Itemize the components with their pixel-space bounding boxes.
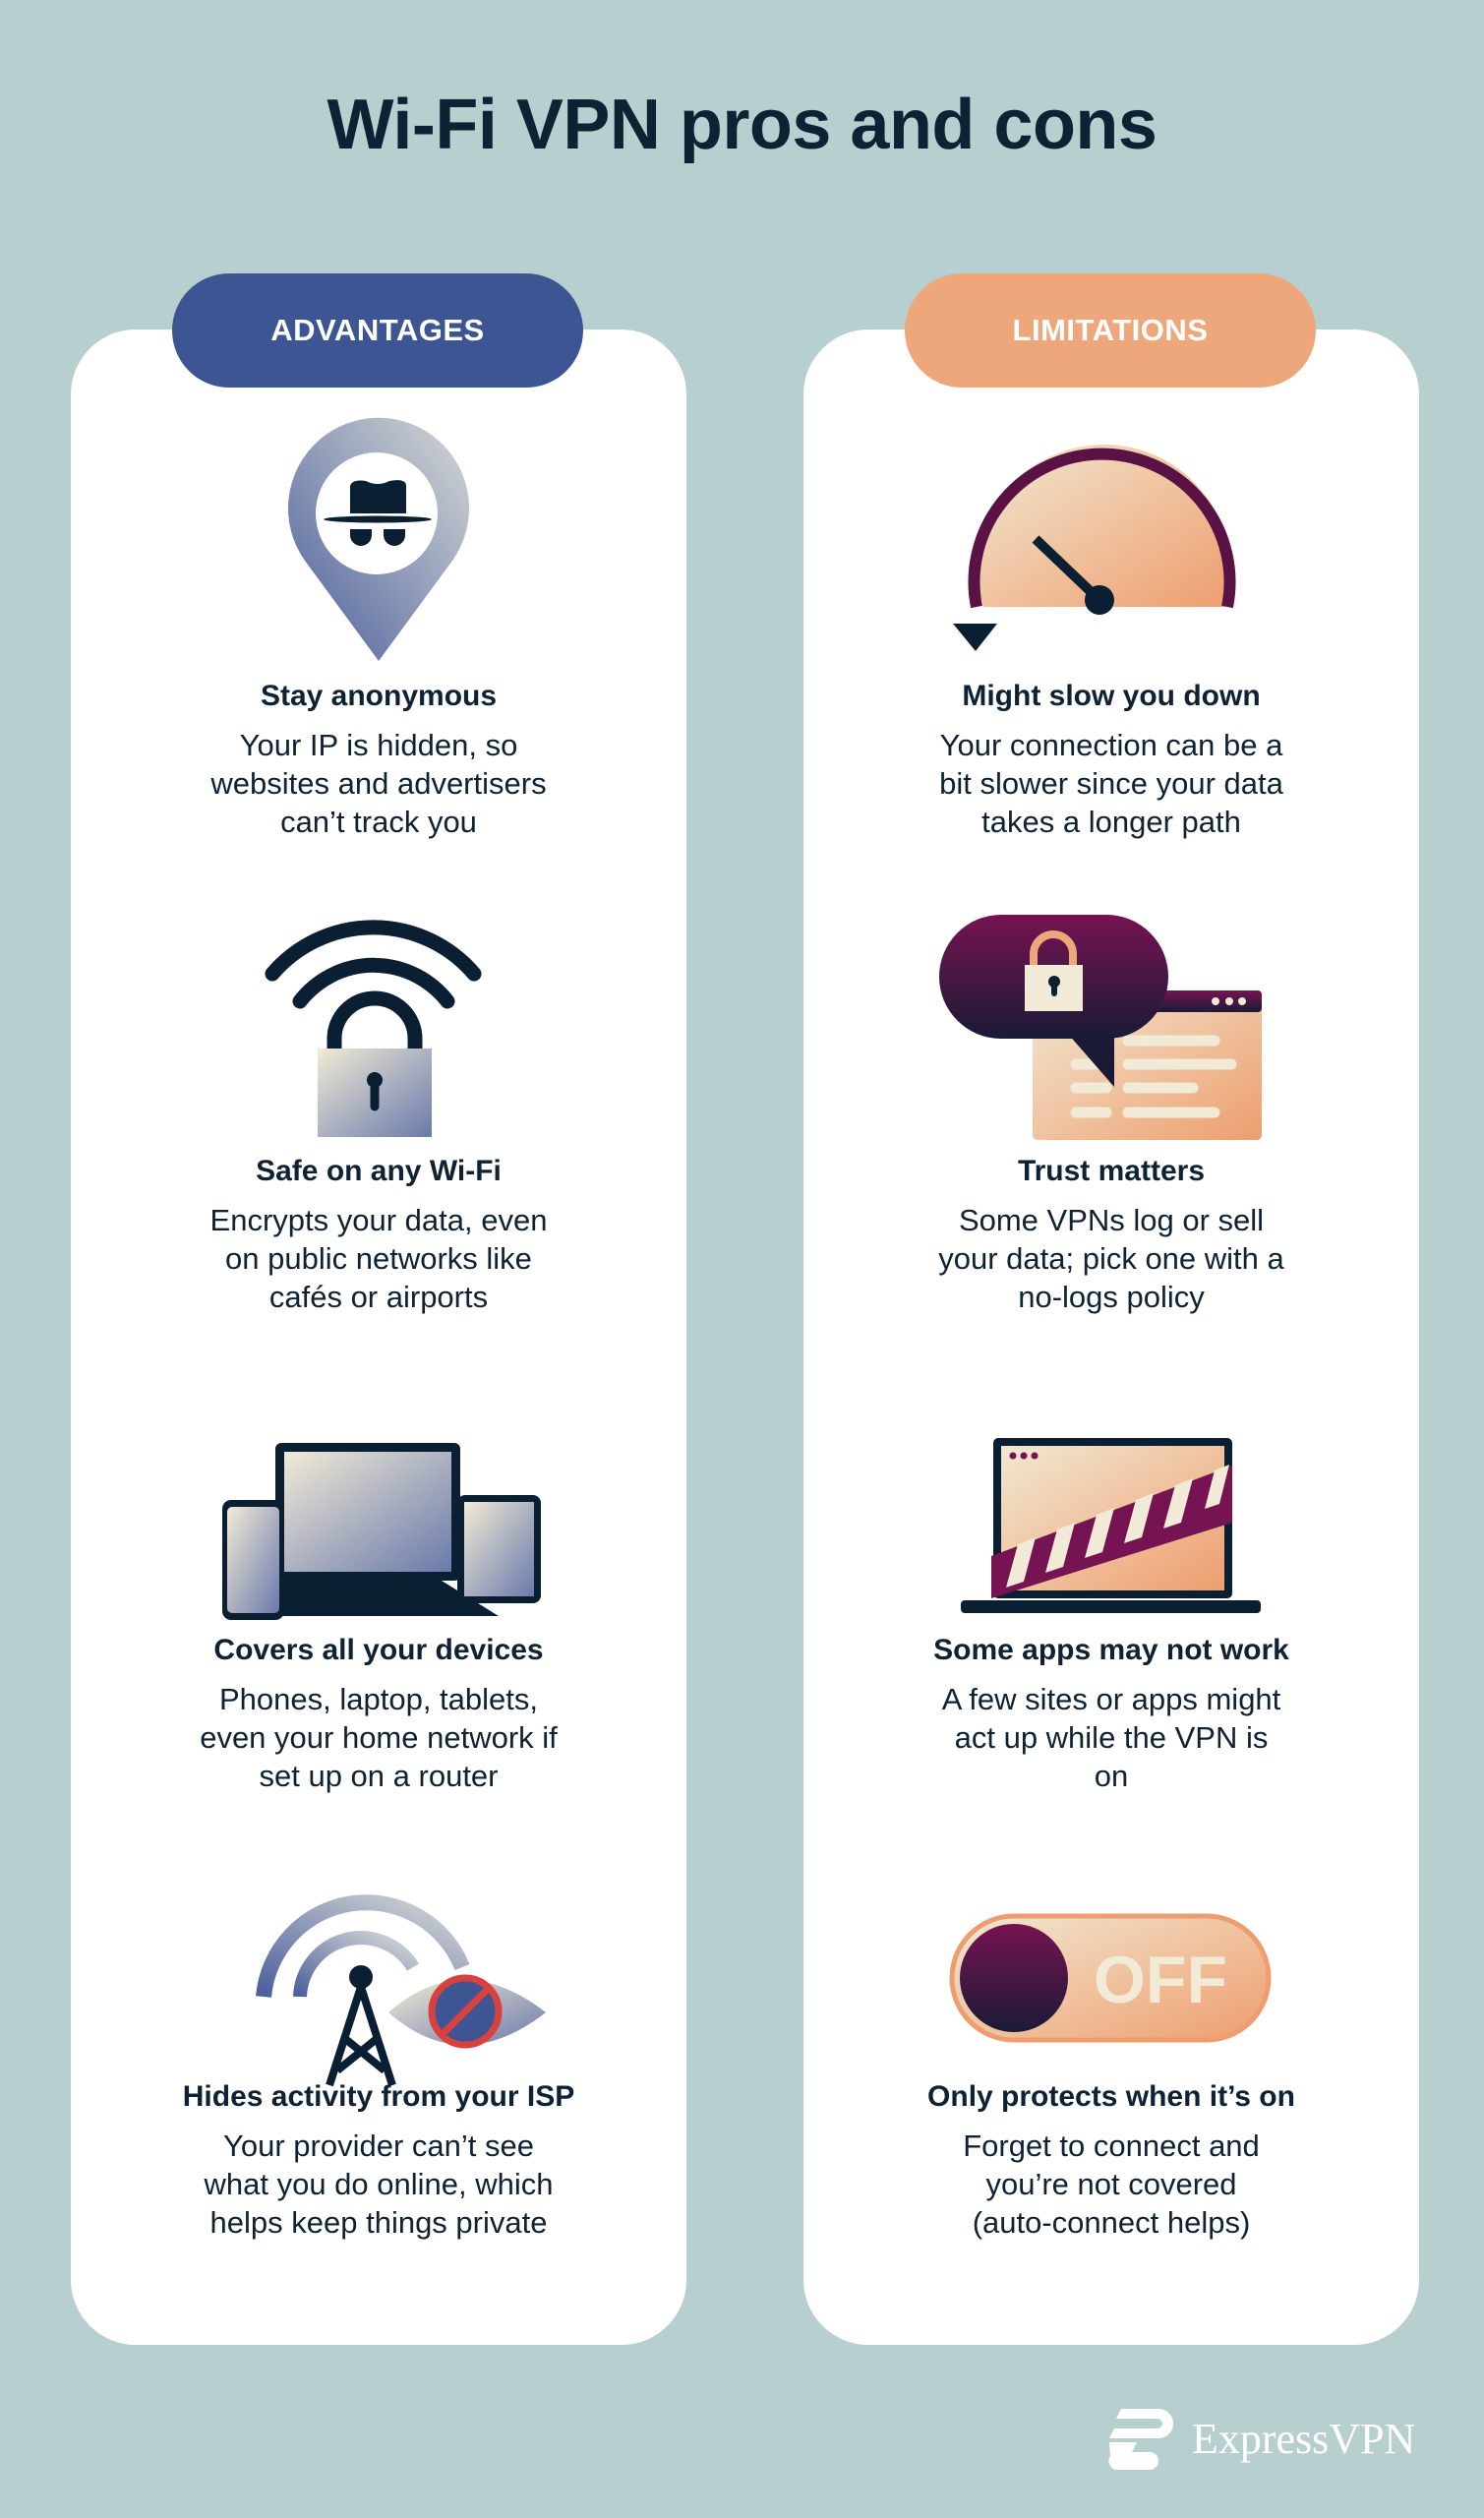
icon: tower with blocked eye [264, 1902, 546, 2085]
pill: advantages [172, 273, 583, 388]
item: stay anonymous [210, 680, 547, 839]
item: covers devices: even your home network if [200, 1720, 558, 1755]
icon: off toggle [952, 1916, 1269, 2040]
item: only when on: you’re not covered [985, 2167, 1237, 2201]
item: might slow: takes a longer path [981, 805, 1241, 839]
item: only when on: Forget to connect and [963, 2128, 1260, 2163]
logo: ExpressVPN: ExpressVPN [1192, 2415, 1415, 2463]
item: apps may not work: A few sites or apps might [942, 1682, 1280, 1716]
icon: incognito pin [288, 418, 469, 661]
pill: advantages: ADVANTAGES [270, 313, 485, 347]
item: might slow: Might slow you down [962, 680, 1261, 712]
item: only when on: Only protects when it’s on [927, 2080, 1295, 2113]
item: safe on wifi: Encrypts your data, even [210, 1203, 547, 1237]
panel: limitations [803, 330, 1419, 2345]
item: hides from ISP [183, 2080, 574, 2240]
item: hides from ISP: helps keep things private [210, 2205, 547, 2240]
item: might slow: Your connection can be a [940, 728, 1282, 762]
item: safe on wifi: Safe on any Wi-Fi [256, 1155, 502, 1187]
icon: devices [222, 1443, 541, 1620]
item: stay anonymous: websites and advertisers [210, 766, 547, 801]
item: might slow: bit slower since your data [939, 766, 1283, 801]
item: hides from ISP: Hides activity from your ISP [183, 2080, 574, 2113]
icon: speedometer [953, 445, 1229, 651]
panel: advantages [71, 330, 686, 2345]
item: stay anonymous: can’t track you [280, 805, 477, 839]
item: covers devices: Covers all your devices [213, 1634, 544, 1666]
pill: limitations: LIMITATIONS [1013, 313, 1208, 347]
logo: ExpressVPN [1108, 2409, 1415, 2470]
item: stay anonymous: Your IP is hidden, so [240, 728, 517, 762]
item: trust matters: your data; pick one with a [938, 1241, 1284, 1276]
item: trust matters [938, 1155, 1284, 1314]
item: apps may not work: act up while the VPN is [955, 1720, 1268, 1755]
item: only when on: (auto-connect helps) [973, 2205, 1250, 2240]
icon: chat lock browser [939, 915, 1262, 1140]
item: hides from ISP: what you do online, which [204, 2167, 553, 2201]
item: might slow [939, 680, 1283, 839]
item: apps may not work [933, 1634, 1289, 1793]
item: only when on [927, 2080, 1295, 2240]
icon: wifi lock [272, 928, 474, 1137]
item: trust matters: Some VPNs log or sell [959, 1203, 1264, 1237]
item: covers devices: Phones, laptop, tablets, [219, 1682, 538, 1716]
icon: blocked laptop [961, 1438, 1261, 1613]
item: hides from ISP: Your provider can’t see [223, 2128, 534, 2163]
item: stay anonymous: Stay anonymous [261, 680, 497, 712]
title: Wi-Fi VPN pros and cons [327, 86, 1157, 164]
pill: limitations [905, 273, 1316, 388]
item: safe on wifi: on public networks like [225, 1241, 532, 1276]
item: apps may not work: on [1095, 1759, 1128, 1793]
item: trust matters: Trust matters [1018, 1155, 1205, 1187]
item: covers devices [200, 1634, 558, 1793]
item: apps may not work: Some apps may not work [933, 1634, 1289, 1666]
item: safe on wifi: cafés or airports [269, 1280, 488, 1314]
item: covers devices: set up on a router [260, 1759, 498, 1793]
icon: off toggle: OFF [1094, 1943, 1227, 2017]
item: safe on wifi [210, 1155, 547, 1314]
item: trust matters: no-logs policy [1018, 1280, 1205, 1314]
